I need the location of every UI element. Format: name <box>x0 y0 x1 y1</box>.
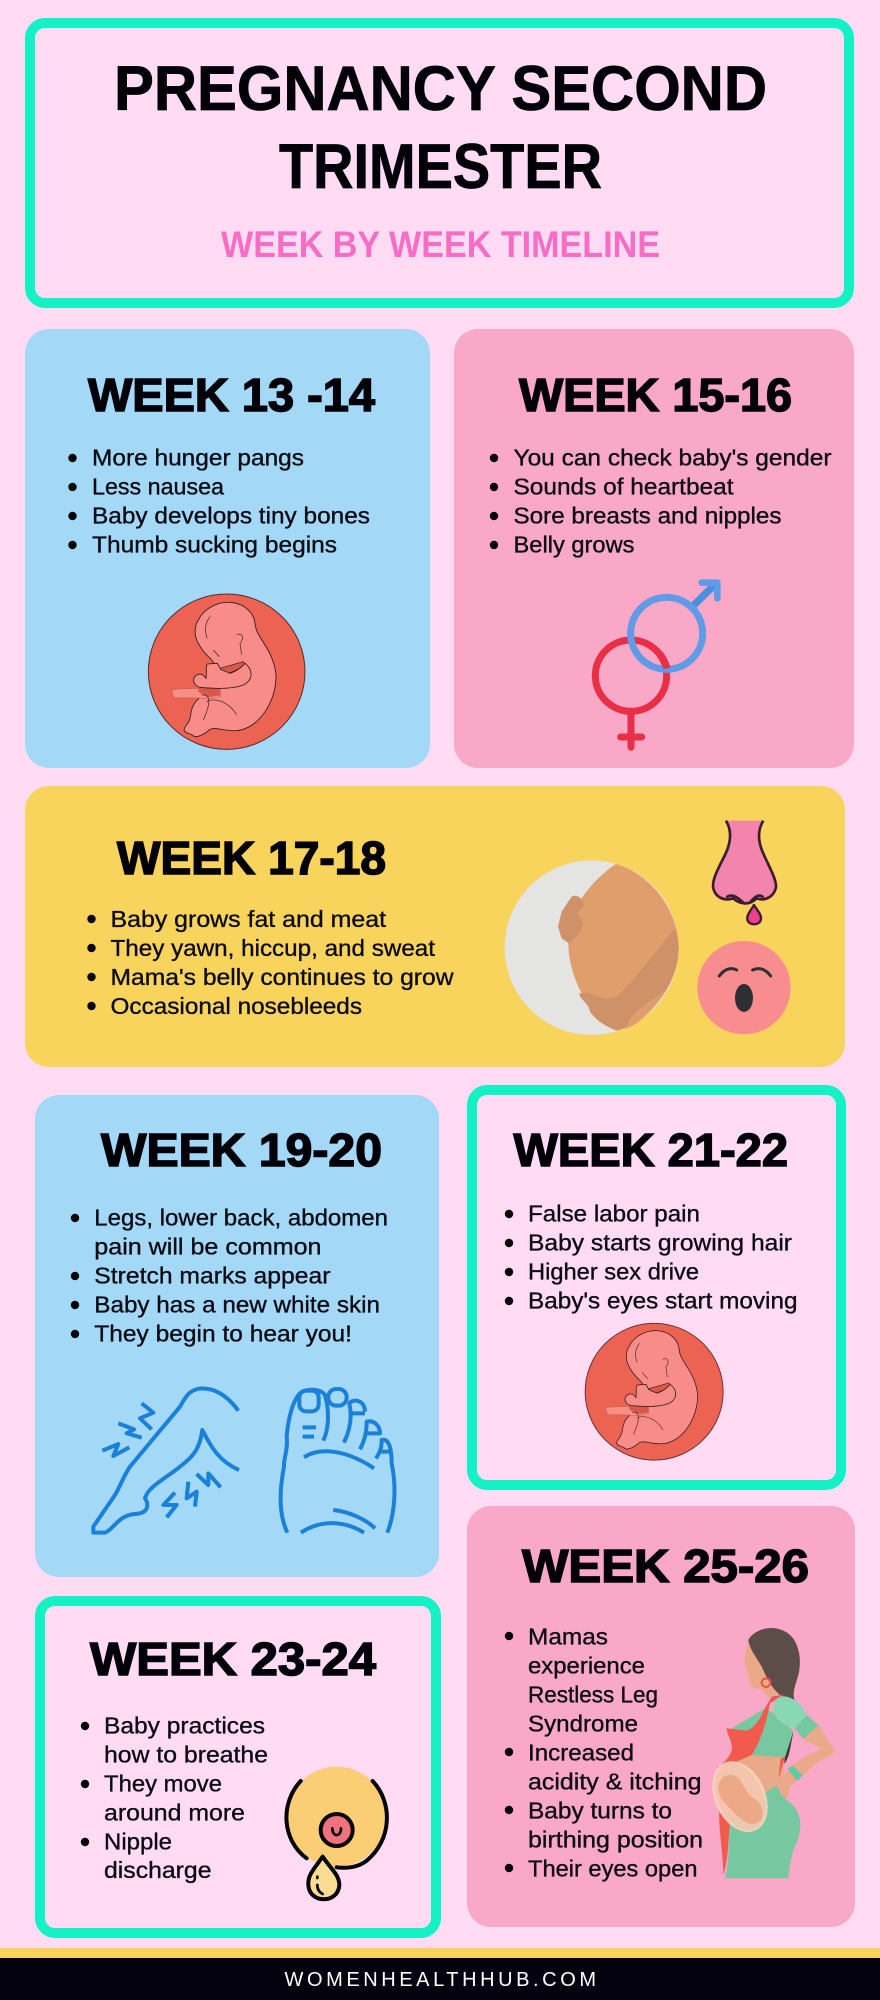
bullet list: week 25-26: birthing position <box>528 1826 703 1852</box>
bullet list: week 15-16: Sounds of heartbeat <box>514 474 734 500</box>
bullet list: week 25-26: Increased <box>528 1740 634 1766</box>
panel: week 17-18 <box>25 786 845 1067</box>
bullet list: week 13-14: Baby develops tiny bones <box>92 502 370 528</box>
bullet list: week 21-22: Baby's eyes start moving <box>528 1288 798 1314</box>
heading: week 17-18: WEEK 17-18 <box>117 832 386 884</box>
panel: week 23-24 <box>40 1601 436 1933</box>
icon: nipple discharge <box>286 1767 387 1899</box>
bullet list: week 17-18: They yawn, hiccup, and sweat <box>110 935 436 961</box>
bullet list: week 17-18: Occasional nosebleeds <box>110 993 362 1019</box>
bullet list: week 15-16: You can check baby's gender <box>514 444 832 470</box>
icon: yawning face <box>697 941 791 1034</box>
bullet list: week 19-20: Legs, lower back, abdomen <box>94 1204 388 1230</box>
heading: week 19-20: WEEK 19-20 <box>101 1124 382 1176</box>
bullet list: week 13-14: Less nausea <box>92 474 224 500</box>
bullet list: week 19-20 <box>71 1204 388 1346</box>
bullet list: week 17-18: Mama's belly continues to grow <box>110 964 454 990</box>
icon: gender symbols <box>595 583 717 747</box>
bullet list: week 23-24 <box>81 1712 268 1883</box>
bullet list: week 23-24: Baby practices <box>104 1712 265 1738</box>
bullet list: week 25-26: experience <box>528 1652 645 1678</box>
title panel <box>30 23 849 303</box>
bullet list: week 13-14: Thumb sucking begins <box>92 532 337 558</box>
footer strip <box>0 1948 880 2000</box>
bullet list: week 21-22 <box>505 1200 798 1314</box>
bullet list: week 21-22: Higher sex drive <box>528 1258 699 1284</box>
icon: pregnant belly <box>505 860 679 1035</box>
bullet list: week 15-16: Sore breasts and nipples <box>514 502 782 528</box>
bullet list: week 19-20: They begin to hear you! <box>94 1320 352 1346</box>
icon: nosebleed <box>713 821 776 924</box>
bullet list: week 23-24: Nipple <box>104 1828 172 1854</box>
bullet list: week 25-26: Baby turns to <box>528 1798 672 1824</box>
bullet list: week 21-22: Baby starts growing hair <box>528 1230 792 1256</box>
footer website: WOMENHEALTHHUB.COM <box>284 1969 596 1991</box>
title: PREGNANCY SECOND <box>114 54 767 124</box>
panel: week 15-16 <box>454 329 854 768</box>
panel: week 25-26 <box>467 1506 855 1927</box>
bullet list: week 15-16: Belly grows <box>514 532 634 558</box>
bullet list: week 13-14 <box>68 444 370 558</box>
bullet list: week 23-24: They move <box>104 1770 222 1796</box>
bullet list: week 23-24: around more <box>104 1800 245 1826</box>
bullet list: week 25-26: Syndrome <box>528 1710 638 1736</box>
icon: fetus in womb <box>148 594 305 749</box>
bullet list: week 25-26: Restless Leg <box>528 1682 658 1708</box>
bullet list: week 17-18 <box>87 906 454 1019</box>
panel: week 13-14 <box>25 329 430 768</box>
bullet list: week 23-24: discharge <box>104 1857 212 1883</box>
title: TRIMESTER <box>279 132 602 202</box>
title <box>114 54 767 202</box>
heading: week 25-26: WEEK 25-26 <box>522 1540 809 1592</box>
bullet list: week 19-20: pain will be common <box>94 1234 322 1260</box>
heading: week 13-14: WEEK 13 -14 <box>88 369 375 421</box>
icon: swollen foot <box>281 1389 394 1533</box>
heading: week 21-22: WEEK 21-22 <box>514 1124 788 1176</box>
bullet list: week 13-14: More hunger pangs <box>92 444 304 470</box>
bullet list: week 21-22: False labor pain <box>528 1200 700 1226</box>
bullet list: week 23-24: how to breathe <box>104 1742 268 1768</box>
panel: week 21-22 <box>472 1090 841 1485</box>
icon: leg pain <box>93 1388 239 1533</box>
bullet list: week 25-26: Their eyes open <box>528 1856 698 1882</box>
bullet list: week 15-16 <box>490 444 832 558</box>
bullet list: week 17-18: Baby grows fat and meat <box>110 906 387 932</box>
bullet list: week 25-26: Mamas <box>528 1624 608 1650</box>
bullet list: week 25-26: acidity & itching <box>528 1768 702 1794</box>
bullet list: week 25-26 <box>505 1624 703 1882</box>
panel: week 19-20 <box>35 1095 439 1577</box>
bullet list: week 19-20: Baby has a new white skin <box>94 1292 380 1318</box>
subtitle: WEEK BY WEEK TIMELINE <box>221 224 660 265</box>
icon: pregnant woman <box>703 1628 836 1878</box>
heading: week 23-24: WEEK 23-24 <box>90 1633 376 1685</box>
icon: fetus in womb <box>585 1323 723 1460</box>
bullet list: week 19-20: Stretch marks appear <box>94 1262 331 1288</box>
heading: week 15-16: WEEK 15-16 <box>519 369 792 421</box>
